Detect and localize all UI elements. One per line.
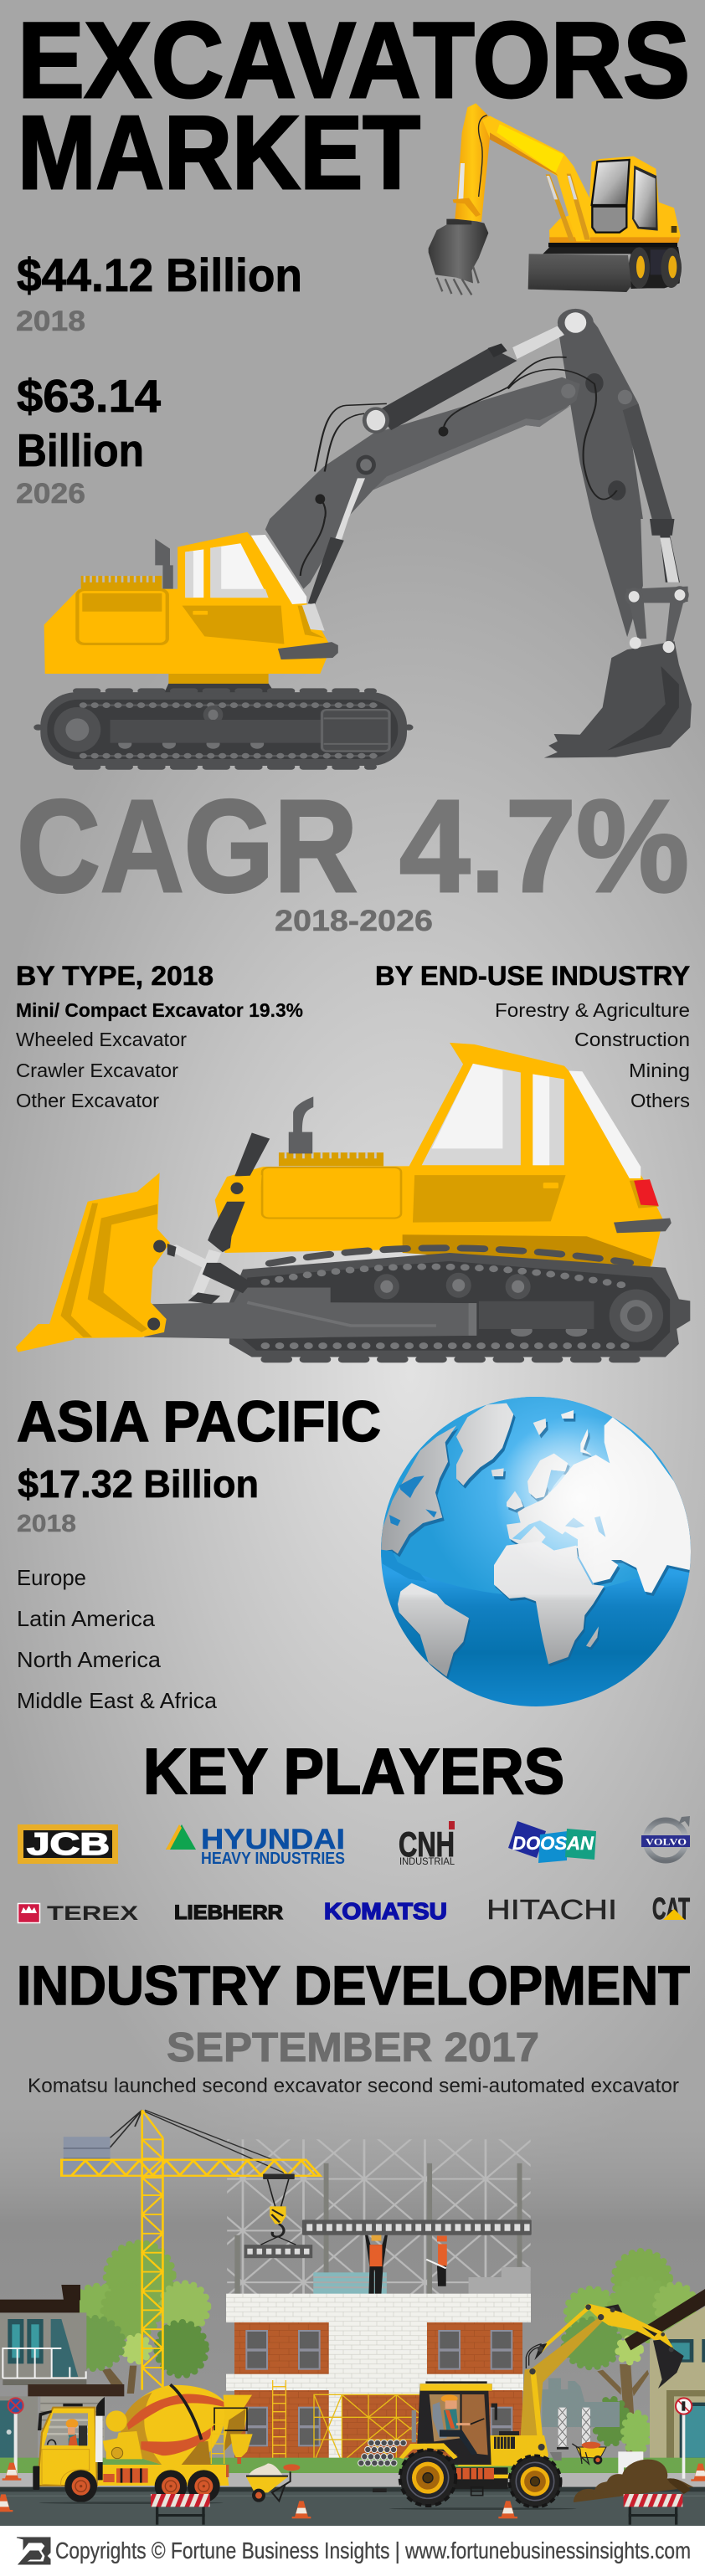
concrete mixer truck bbox=[33, 2384, 253, 2504]
lower ocean bbox=[378, 1395, 693, 1710]
driver bbox=[433, 2402, 448, 2438]
logo: Liebherr: LIEBHERR bbox=[174, 1901, 283, 1924]
engine bbox=[458, 2435, 548, 2466]
right wheelbarrow bbox=[576, 2447, 606, 2458]
small excavation-site props: traffic cones and barriers bbox=[0, 2398, 705, 2525]
logo: JCB bbox=[18, 1824, 118, 1864]
continents: north bbox=[381, 1403, 692, 1593]
boom bbox=[521, 2316, 605, 2437]
lower stick strut bbox=[623, 403, 672, 519]
text: development description: Komatsu launched second excavator second semi-automated excavator bbox=[28, 2075, 679, 2097]
crane bbox=[62, 2110, 320, 2390]
mast bbox=[142, 2110, 162, 2390]
stat: 2026 market value bbox=[16, 370, 161, 510]
left tree bbox=[0, 2243, 208, 2458]
cab bbox=[417, 2384, 492, 2465]
upper ocean bbox=[379, 1395, 692, 1596]
icon: large crawler excavator bbox=[38, 309, 692, 767]
drum bbox=[120, 2385, 226, 2465]
logo: CNH Industrial bbox=[399, 1821, 455, 1867]
list: other regions: Europe bbox=[17, 1565, 86, 1590]
bucket bbox=[544, 641, 692, 757]
motor and pump bbox=[103, 2431, 142, 2459]
list: by end-use industry: Forestry & Agriculture bbox=[495, 999, 690, 1021]
logo: JCB: JCB bbox=[27, 1827, 110, 1861]
sphere highlight bbox=[501, 1419, 625, 1575]
blade bbox=[16, 1173, 170, 1352]
cab and body bbox=[215, 1043, 663, 1266]
list: by end-use industry: Others bbox=[630, 1090, 690, 1111]
left house bbox=[0, 2285, 124, 2458]
right house bbox=[650, 2307, 705, 2462]
stat: 2018 market value bbox=[16, 249, 302, 337]
excavator stick bbox=[558, 310, 643, 637]
chute and hopper bbox=[224, 2395, 252, 2452]
land shadow bbox=[383, 1406, 694, 1596]
icon: bulldozer bbox=[16, 1043, 690, 1359]
lower boom rod bbox=[335, 478, 365, 540]
ground and road bbox=[0, 2458, 705, 2526]
push rods and cylinders bbox=[167, 1244, 211, 1270]
list: by type bbox=[16, 961, 303, 1111]
list: by type: Other Excavator bbox=[16, 1090, 159, 1111]
dirt mound bbox=[574, 2460, 693, 2502]
boom bbox=[265, 377, 580, 589]
boom cylinder bbox=[375, 347, 517, 430]
track bbox=[229, 1253, 690, 1357]
excavator body bbox=[44, 532, 338, 684]
stat: 2026 market value: Billion bbox=[17, 424, 144, 476]
stat: 2018 market value: 2018 bbox=[16, 305, 85, 337]
logo: CNH Industrial: INDUSTRIAL bbox=[399, 1855, 455, 1867]
pallet, dirt, wheelbarrows bbox=[572, 2398, 693, 2502]
heading and stats: Asia Pacific: ASIA PACIFIC bbox=[17, 1389, 381, 1454]
logo: Hyundai Heavy Industries: HEAVY INDUSTRIES bbox=[201, 1850, 345, 1868]
logo: Doosan bbox=[508, 1821, 596, 1863]
list: by type: Crawler Excavator bbox=[16, 1060, 178, 1081]
heading: key players: KEY PLAYERS bbox=[143, 1736, 564, 1808]
illustration: construction site bbox=[0, 2076, 705, 2526]
logo: Fortune Business Insights bbox=[17, 2538, 50, 2564]
hoses bbox=[301, 357, 617, 576]
green foreground bush and pile of pipes bbox=[358, 2440, 406, 2466]
logo: CNH Industrial: CNH bbox=[399, 1824, 455, 1864]
list: by type: Wheeled Excavator bbox=[16, 1029, 187, 1050]
skyline and pylons bbox=[542, 2378, 620, 2427]
list: by end-use industry: Mining bbox=[629, 1060, 690, 1081]
CAGR figure: CAGR bbox=[17, 773, 358, 920]
boom bbox=[482, 115, 590, 241]
list: other regions: Latin America bbox=[17, 1606, 156, 1631]
logo: Terex: TEREX bbox=[47, 1902, 138, 1925]
logo: Hyundai Heavy Industries: HYUNDAI bbox=[201, 1824, 345, 1855]
counterweight bbox=[64, 2137, 111, 2173]
logo: Komatsu: KOMATSU bbox=[324, 1898, 447, 1924]
list: by end-use industry: BY END-USE INDUSTRY bbox=[375, 961, 690, 991]
CAGR figure: 2018-2026 bbox=[275, 905, 433, 937]
CAGR figure: 4.7% bbox=[399, 773, 689, 920]
title bbox=[18, 1, 690, 211]
logo: Doosan: DOOSAN bbox=[512, 1833, 594, 1854]
cables bbox=[111, 2110, 284, 2173]
logo: Terex bbox=[18, 1902, 138, 1925]
no parking sign bbox=[8, 2398, 23, 2473]
icon: globe bbox=[378, 1395, 694, 1710]
wheelbarrow with sand bbox=[246, 2463, 300, 2502]
scaffold bbox=[227, 2139, 531, 2295]
stat: 2026 market value: $63.14 bbox=[17, 370, 161, 422]
hook bbox=[263, 2173, 295, 2179]
icon: small wheeled excavator bbox=[429, 103, 682, 295]
stick cylinder and rod bbox=[650, 519, 680, 582]
stat: 2026 market value: 2026 bbox=[16, 478, 85, 510]
crawler track bbox=[38, 684, 409, 767]
body bbox=[549, 157, 681, 243]
steel beams bbox=[302, 2219, 532, 2235]
cab bbox=[592, 160, 630, 205]
list: other regions: North America bbox=[17, 1647, 162, 1672]
CAGR figure bbox=[17, 773, 689, 937]
right tree and house bbox=[542, 2251, 705, 2462]
driver bbox=[68, 2434, 79, 2445]
arm and frame bbox=[144, 1288, 476, 1339]
list: by end-use industry: Construction bbox=[574, 1029, 690, 1050]
list: by type: BY TYPE, 2018 bbox=[16, 961, 214, 991]
windows bbox=[246, 2331, 512, 2445]
sky bbox=[0, 2076, 705, 2526]
bucket bbox=[429, 220, 488, 283]
list: other regions bbox=[17, 1565, 218, 1713]
underbody bbox=[427, 2467, 508, 2489]
subheading: date: SEPTEMBER 2017 bbox=[167, 2025, 539, 2071]
undercarriage bbox=[543, 247, 681, 289]
title: MARKET bbox=[18, 95, 420, 211]
workers on the roof bbox=[365, 2235, 447, 2295]
bucket linkage bbox=[626, 587, 688, 645]
heading and stats: Asia Pacific: 2018 bbox=[17, 1511, 76, 1537]
list: by type: Mini/ Compact Excavator 19.3% bbox=[16, 999, 303, 1021]
building bbox=[226, 2294, 531, 2467]
jib bbox=[62, 2160, 320, 2176]
stat: 2018 market value: $44.12 Billion bbox=[17, 249, 302, 301]
yellow ladder bbox=[273, 2380, 286, 2463]
footer strip bbox=[0, 2526, 705, 2576]
logo: Volvo: VOLVO bbox=[646, 1836, 687, 1848]
logo: Hitachi: HITACHI bbox=[486, 1894, 617, 1925]
excavator-loader tractor bbox=[389, 2304, 684, 2510]
stacked panels bbox=[469, 2267, 531, 2295]
heading and stats: Asia Pacific: $17.32 Billion bbox=[18, 1462, 259, 1506]
logo: Volvo bbox=[641, 1816, 690, 1860]
dipper bbox=[584, 2304, 674, 2352]
continents: Africa, South America, Madagascar bbox=[399, 1544, 605, 1679]
columns bbox=[234, 2163, 522, 2296]
cab bbox=[38, 2408, 97, 2486]
logo: Hyundai Heavy Industries bbox=[166, 1824, 345, 1868]
yellow facade scaffold bbox=[314, 2394, 471, 2462]
stick bbox=[455, 103, 490, 222]
blade bbox=[528, 254, 631, 292]
list: by end-use industry bbox=[375, 961, 690, 1111]
chassis bbox=[98, 2465, 229, 2486]
heading and stats: Asia Pacific bbox=[17, 1389, 381, 1537]
inland waters bbox=[399, 1475, 425, 1498]
list: other regions: Middle East & Africa bbox=[17, 1688, 218, 1713]
road sign post bbox=[682, 2413, 685, 2479]
